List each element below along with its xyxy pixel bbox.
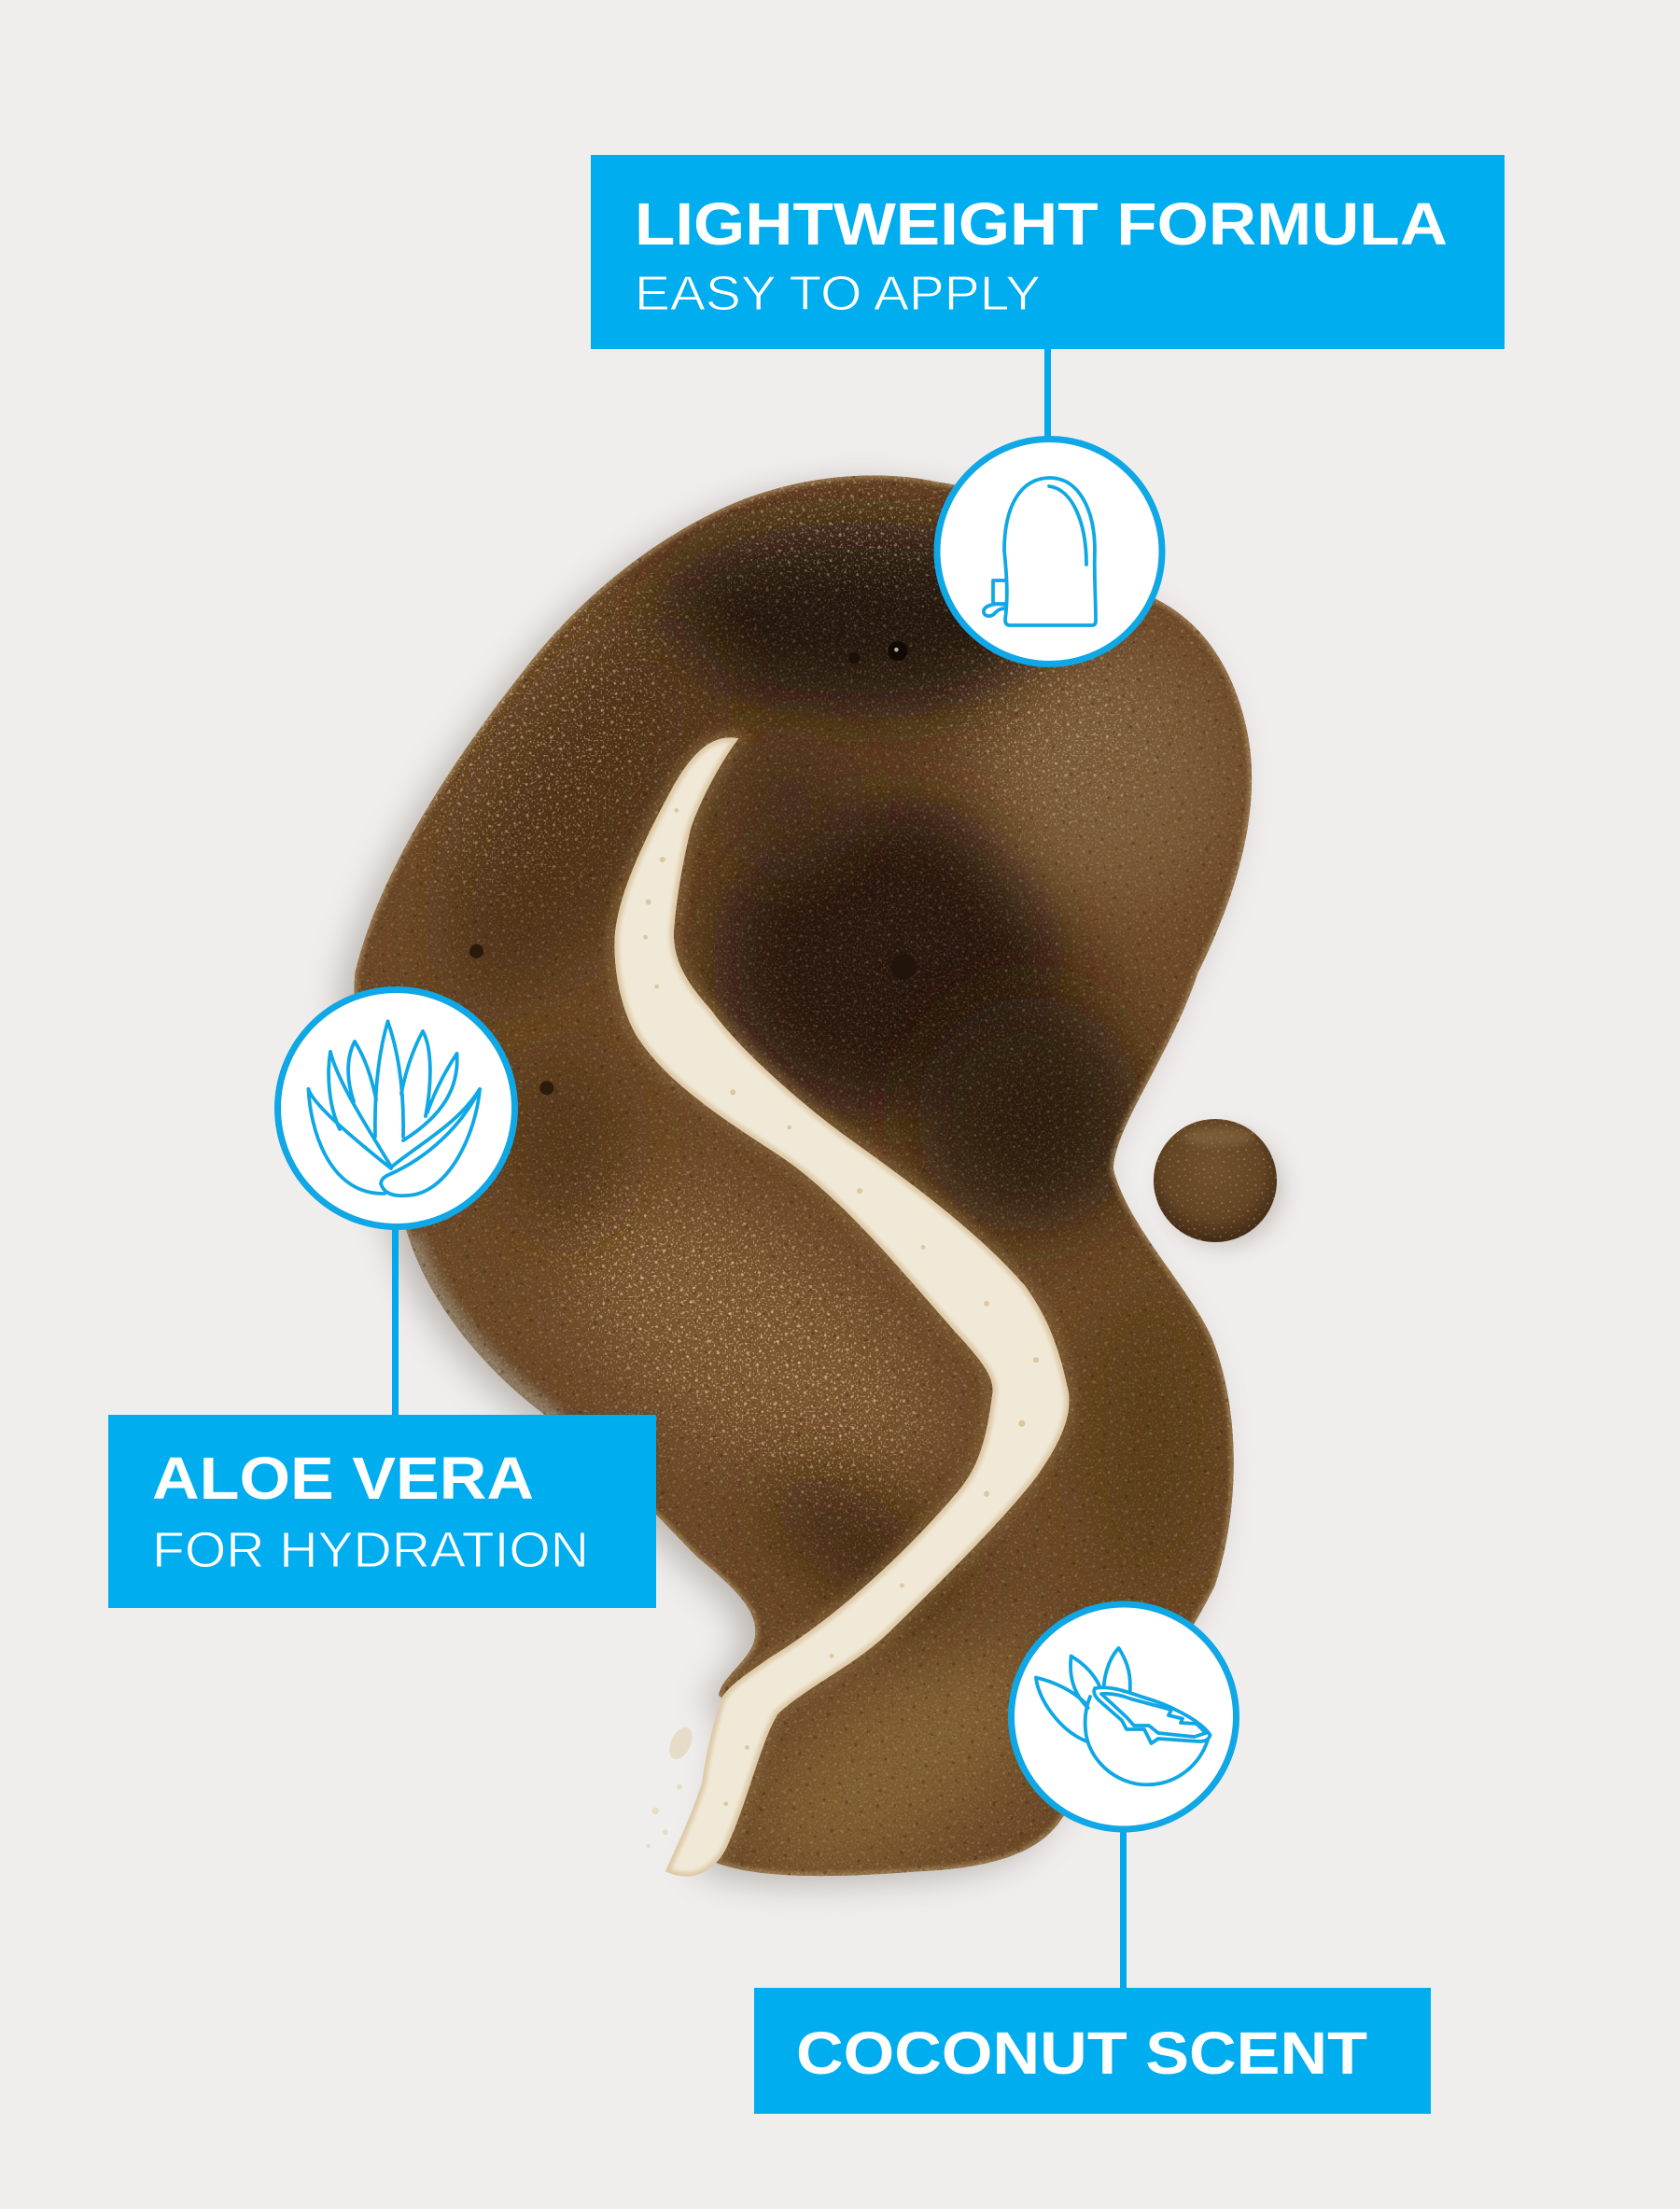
swatch shadow [340,484,1238,1884]
callout: coconut scent [754,1604,1431,2114]
callout: aloe vera [108,989,656,1608]
small foam droplet [1148,1115,1283,1251]
connector line [392,1226,399,1417]
subheading: FOR HYDRATION [152,1522,589,1578]
heading: ALOE VERA [152,1445,534,1512]
label box [754,1988,1431,2114]
connector line [1120,1829,1127,1990]
cream splatter [646,1724,697,1848]
label box [591,155,1505,349]
swatch body [355,476,1253,1876]
label box [108,1415,656,1608]
foam rim [355,475,1252,1876]
callout: lightweight formula [591,155,1505,664]
heading: COCONUT SCENT [796,2020,1367,2087]
cream ribbon [614,737,1070,1877]
subheading: EASY TO APPLY [635,267,1041,321]
foam swatch of the product [324,451,1282,1922]
connector line [1044,345,1051,440]
icon: aloe plant [278,989,515,1226]
icon: tanning mitt [937,439,1162,664]
icon: coconut [1012,1604,1236,1829]
heading: LIGHTWEIGHT FORMULA [635,190,1448,258]
